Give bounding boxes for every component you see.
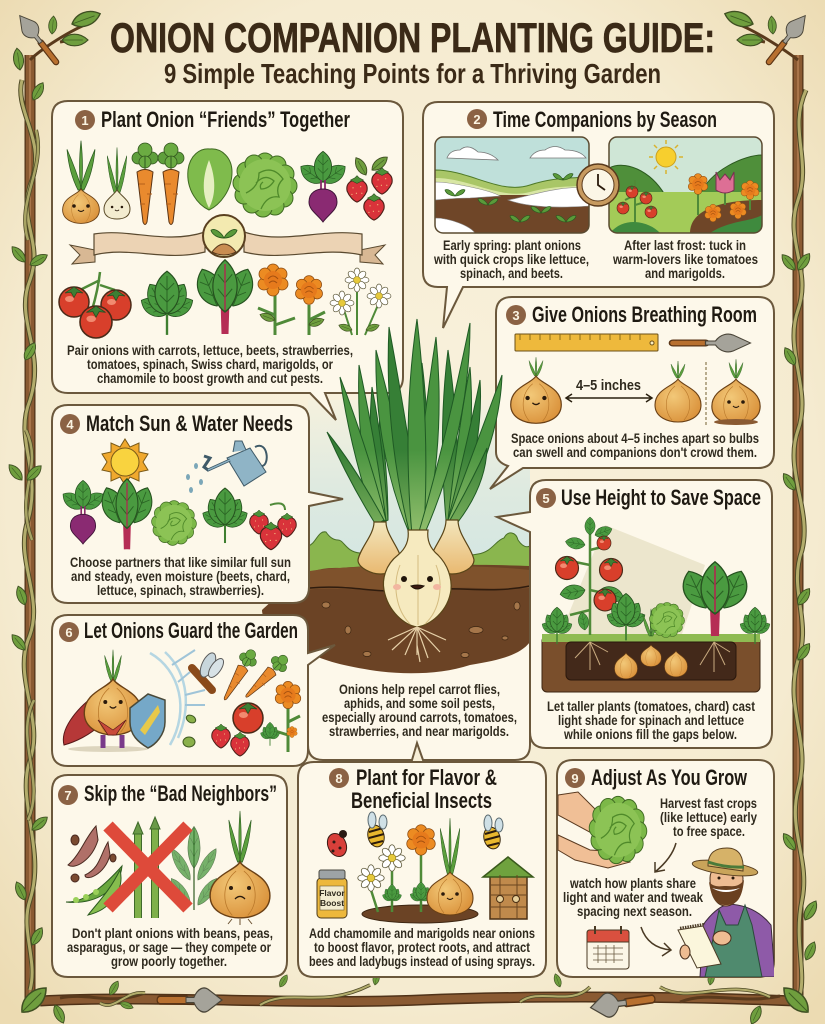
icon: chamomile: [330, 268, 391, 335]
number badge 2: 2: [473, 112, 481, 127]
text 2 right: After last frost: tuck in: [624, 238, 746, 253]
icon: smiling center onion: [383, 530, 451, 627]
text 2 left: spinach, and beets.: [460, 266, 563, 281]
text 7: Don't plant onions with beans, peas,: [72, 926, 273, 941]
icon: clock: [577, 164, 619, 206]
heading 8: Beneficial Insects: [351, 788, 492, 813]
icon: marigolds: [258, 264, 325, 335]
text 7: [67, 926, 273, 969]
text 3: [511, 431, 759, 460]
number badge 7: 7: [64, 788, 72, 803]
vine border: left: [6, 48, 50, 1000]
icon: chard: [191, 260, 259, 334]
text 7: asparagus, or sage — they compete or: [67, 940, 272, 955]
text 4: lettuce, spinach, strawberries).: [97, 583, 264, 598]
icon: tomato plant: [556, 517, 626, 635]
heading 4: Match Sun & Water Needs: [86, 411, 293, 436]
heading 2: Time Companions by Season: [493, 107, 717, 132]
spacing arrow with label: [566, 378, 652, 402]
icon: top-left trowel and branch: [13, 7, 102, 67]
icon: hands holding lettuce: [558, 792, 647, 868]
icon: crowded onion: [712, 359, 760, 425]
panel 6 companion text box: strawberries, and near marigolds.: [329, 724, 509, 739]
icon: carrots: [132, 143, 184, 224]
panel 2: time companions by season: [423, 102, 774, 328]
arrow to notepad: [641, 927, 671, 956]
vine border: right: [779, 55, 820, 1000]
number badge 3: [506, 305, 526, 325]
icon: notepad: [678, 924, 731, 968]
icon: sage: [167, 827, 221, 910]
text 9 top: Harvest fast crops: [660, 796, 757, 811]
icon: spinach: [200, 488, 250, 543]
icon: strawberries: [250, 503, 296, 550]
text 2 left: with quick crops like lettuce,: [433, 252, 589, 267]
icon: peas: [66, 866, 122, 915]
icon: beet: [59, 480, 107, 544]
number badge 1: 1: [81, 113, 89, 128]
icon: bottom-left trowel: [160, 988, 222, 1012]
shade wedge: [558, 525, 705, 640]
icon: wasp: [192, 651, 226, 690]
icon: onions: [63, 141, 130, 223]
text 9 bottom: light and water and tweak: [563, 890, 703, 905]
text 9 top: (like lettuce) early: [660, 810, 757, 825]
icon: sun: [102, 439, 148, 485]
hero onion plants: [327, 319, 502, 662]
icon: chard: [97, 479, 157, 549]
number badge 9: 9: [571, 771, 579, 786]
icon: shield arcs: [150, 652, 186, 745]
icon: lettuce: [233, 153, 297, 217]
soil cross-section: [542, 634, 760, 692]
number badge 4: 4: [66, 417, 74, 432]
text 5: light shade for spinach and lettuce: [558, 713, 744, 728]
text 8: bees and ladybugs instead of using sprays.: [309, 954, 535, 969]
text 3: can swell and companions don't crowd them.: [513, 445, 757, 460]
right onion leaves: [442, 350, 502, 522]
text 3: Space onions about 4–5 inches apart so bulbs: [511, 431, 759, 446]
text 7: grow poorly together.: [111, 954, 227, 969]
icon: shrubs, spinach, lettuce: [540, 594, 772, 644]
icon: superhero onion: [63, 650, 165, 752]
text 9 top: to free space.: [673, 824, 745, 839]
icon: soil mound: [362, 905, 478, 923]
text 9 top: [660, 796, 757, 839]
number badge 6: [59, 622, 79, 642]
icon: plain onion: [655, 361, 701, 422]
panel 7: bad neighbors: [52, 775, 287, 977]
center garden soil and grass: [262, 532, 530, 673]
icon: flavor boost jar: Boost: [320, 898, 344, 908]
icon: sad onion: [210, 811, 270, 925]
heading 9: Adjust As You Grow: [591, 765, 748, 790]
vine border: bottom: [17, 971, 813, 1024]
panel 6: guard the garden: [52, 615, 335, 766]
text 2 left: [433, 238, 589, 281]
panel 1: plant onion friends: [52, 101, 403, 420]
dashed divider: [705, 362, 707, 425]
icon: happy onion: [511, 357, 561, 423]
number badge 8: 8: [335, 771, 343, 786]
icon: bee right: [481, 815, 503, 851]
text 9 bottom: watch how plants share: [569, 876, 696, 891]
number badge 4: [60, 414, 80, 434]
icon: bug hotel: [483, 857, 533, 919]
text 5: Let taller plants (tomatoes, chard) cast: [547, 699, 755, 714]
icon: right bulb: [430, 520, 474, 574]
icon: strawberries: [347, 154, 392, 220]
scene: after last frost: [609, 137, 762, 233]
subtitle: 9 Simple Teaching Points for a Thriving Garden: [164, 58, 661, 89]
text 2 right: warm-lovers like tomatoes: [612, 252, 758, 267]
icon: bottom-right trowel: [589, 987, 654, 1020]
heading 8: Plant for Flavor &: [356, 765, 497, 790]
text 8: Add chamomile and marigolds near onions: [309, 926, 535, 941]
icon: roots: [388, 627, 446, 662]
icon: happy onion: [427, 818, 473, 915]
icon: ladybug: [324, 830, 350, 860]
number badge 1: [75, 110, 95, 130]
spacing arrow with label: 4–5 inches: [576, 378, 641, 394]
icon: top-right trowel and branch: [723, 7, 812, 67]
icon: marigold: [259, 681, 301, 752]
text 2 right: and marigolds.: [645, 266, 725, 281]
heading 7: Skip the “Bad Neighbors”: [84, 781, 277, 806]
text 4: and steady, even moisture (beets, chard,: [71, 569, 290, 584]
banner with seedling emblem: [70, 215, 385, 264]
icon: lettuce: [152, 501, 196, 545]
icon: left bulb: [358, 522, 402, 574]
text 8: [309, 926, 535, 969]
number badge 7: [58, 785, 78, 805]
center onion leaves: [376, 319, 470, 535]
icon: buried onions: [614, 645, 688, 679]
icon: ruler: [515, 334, 658, 351]
icon: bee left: [365, 812, 387, 849]
left onion leaves: [327, 365, 388, 525]
panel 6 companion text box: especially around carrots, tomatoes,: [322, 710, 517, 725]
number badge 5: [536, 488, 556, 508]
icon: bugs: [183, 713, 197, 747]
text 1: Pair onions with carrots, lettuce, beets, strawberries,: [67, 343, 353, 358]
panel 6 companion text box: [308, 640, 530, 760]
panel 9: adjust as you grow: [557, 760, 775, 977]
heading 8: [351, 765, 497, 813]
icon: red cross: [108, 826, 188, 908]
text 5: while onions fill the gaps below.: [563, 727, 737, 742]
text 5: [547, 699, 755, 742]
icon: tall chard: [676, 562, 754, 636]
panel 6 companion text box: Onions help repel carrot flies,: [339, 682, 500, 697]
panel 5: use height: [497, 480, 772, 748]
panel 4: sun and water: [52, 405, 343, 603]
icon: tomato: [233, 703, 263, 733]
number badge 6: 6: [65, 625, 73, 640]
icon: farmer: [691, 848, 775, 977]
panel 8: flavor and insects: [298, 762, 546, 977]
number badge 3: 3: [512, 308, 520, 323]
number badge 2: [467, 109, 487, 129]
text 1: tomatoes, spinach, Swiss chard, marigolds, or: [87, 357, 334, 372]
icon: calendar: [587, 926, 629, 969]
text 9 bottom: [563, 876, 703, 919]
icon: spinach: [137, 271, 197, 335]
icon: flowers: [358, 825, 435, 912]
icon: tomatoes: [59, 272, 131, 338]
icon: carrots: [217, 646, 293, 704]
icon: flavor boost jar: Flavor: [319, 888, 345, 898]
scene: early spring: [435, 137, 589, 233]
number badge 5: 5: [542, 491, 550, 506]
text 9 bottom: spacing next season.: [577, 904, 692, 919]
text 8: to boost flavor, protect roots, and attract: [314, 940, 530, 955]
icon: flavor boost jar: [317, 870, 347, 918]
number badge 9: [565, 768, 585, 788]
panel 6 companion text box: aphids, and some soil pests,: [344, 696, 495, 711]
number badge 8: [329, 768, 349, 788]
icon: strawberries: [212, 724, 249, 756]
heading 5: Use Height to Save Space: [561, 485, 761, 510]
arrow to lettuce text: [655, 843, 676, 872]
text 1: chamomile to boost growth and cut pests.: [97, 371, 323, 386]
icon: beans: [68, 826, 116, 882]
icon: beet: [297, 151, 349, 222]
heading 6: Let Onions Guard the Garden: [84, 618, 298, 643]
heading 1: Plant Onion “Friends” Together: [101, 107, 350, 132]
text 2 left: Early spring: plant onions: [443, 238, 581, 253]
panel 3: breathing room: [490, 297, 774, 489]
icon: pest arrows: [172, 650, 205, 705]
icon: watering can: [186, 441, 267, 493]
icon: trowel: [673, 334, 750, 352]
text 4: Choose partners that like similar full sun: [70, 555, 291, 570]
center garden sky: [308, 400, 530, 570]
text 1: [67, 343, 353, 386]
text 4: [70, 555, 291, 598]
icon: romaine lettuce: [188, 149, 232, 210]
icon: asparagus: [133, 817, 160, 918]
text 2 right: [612, 238, 758, 281]
